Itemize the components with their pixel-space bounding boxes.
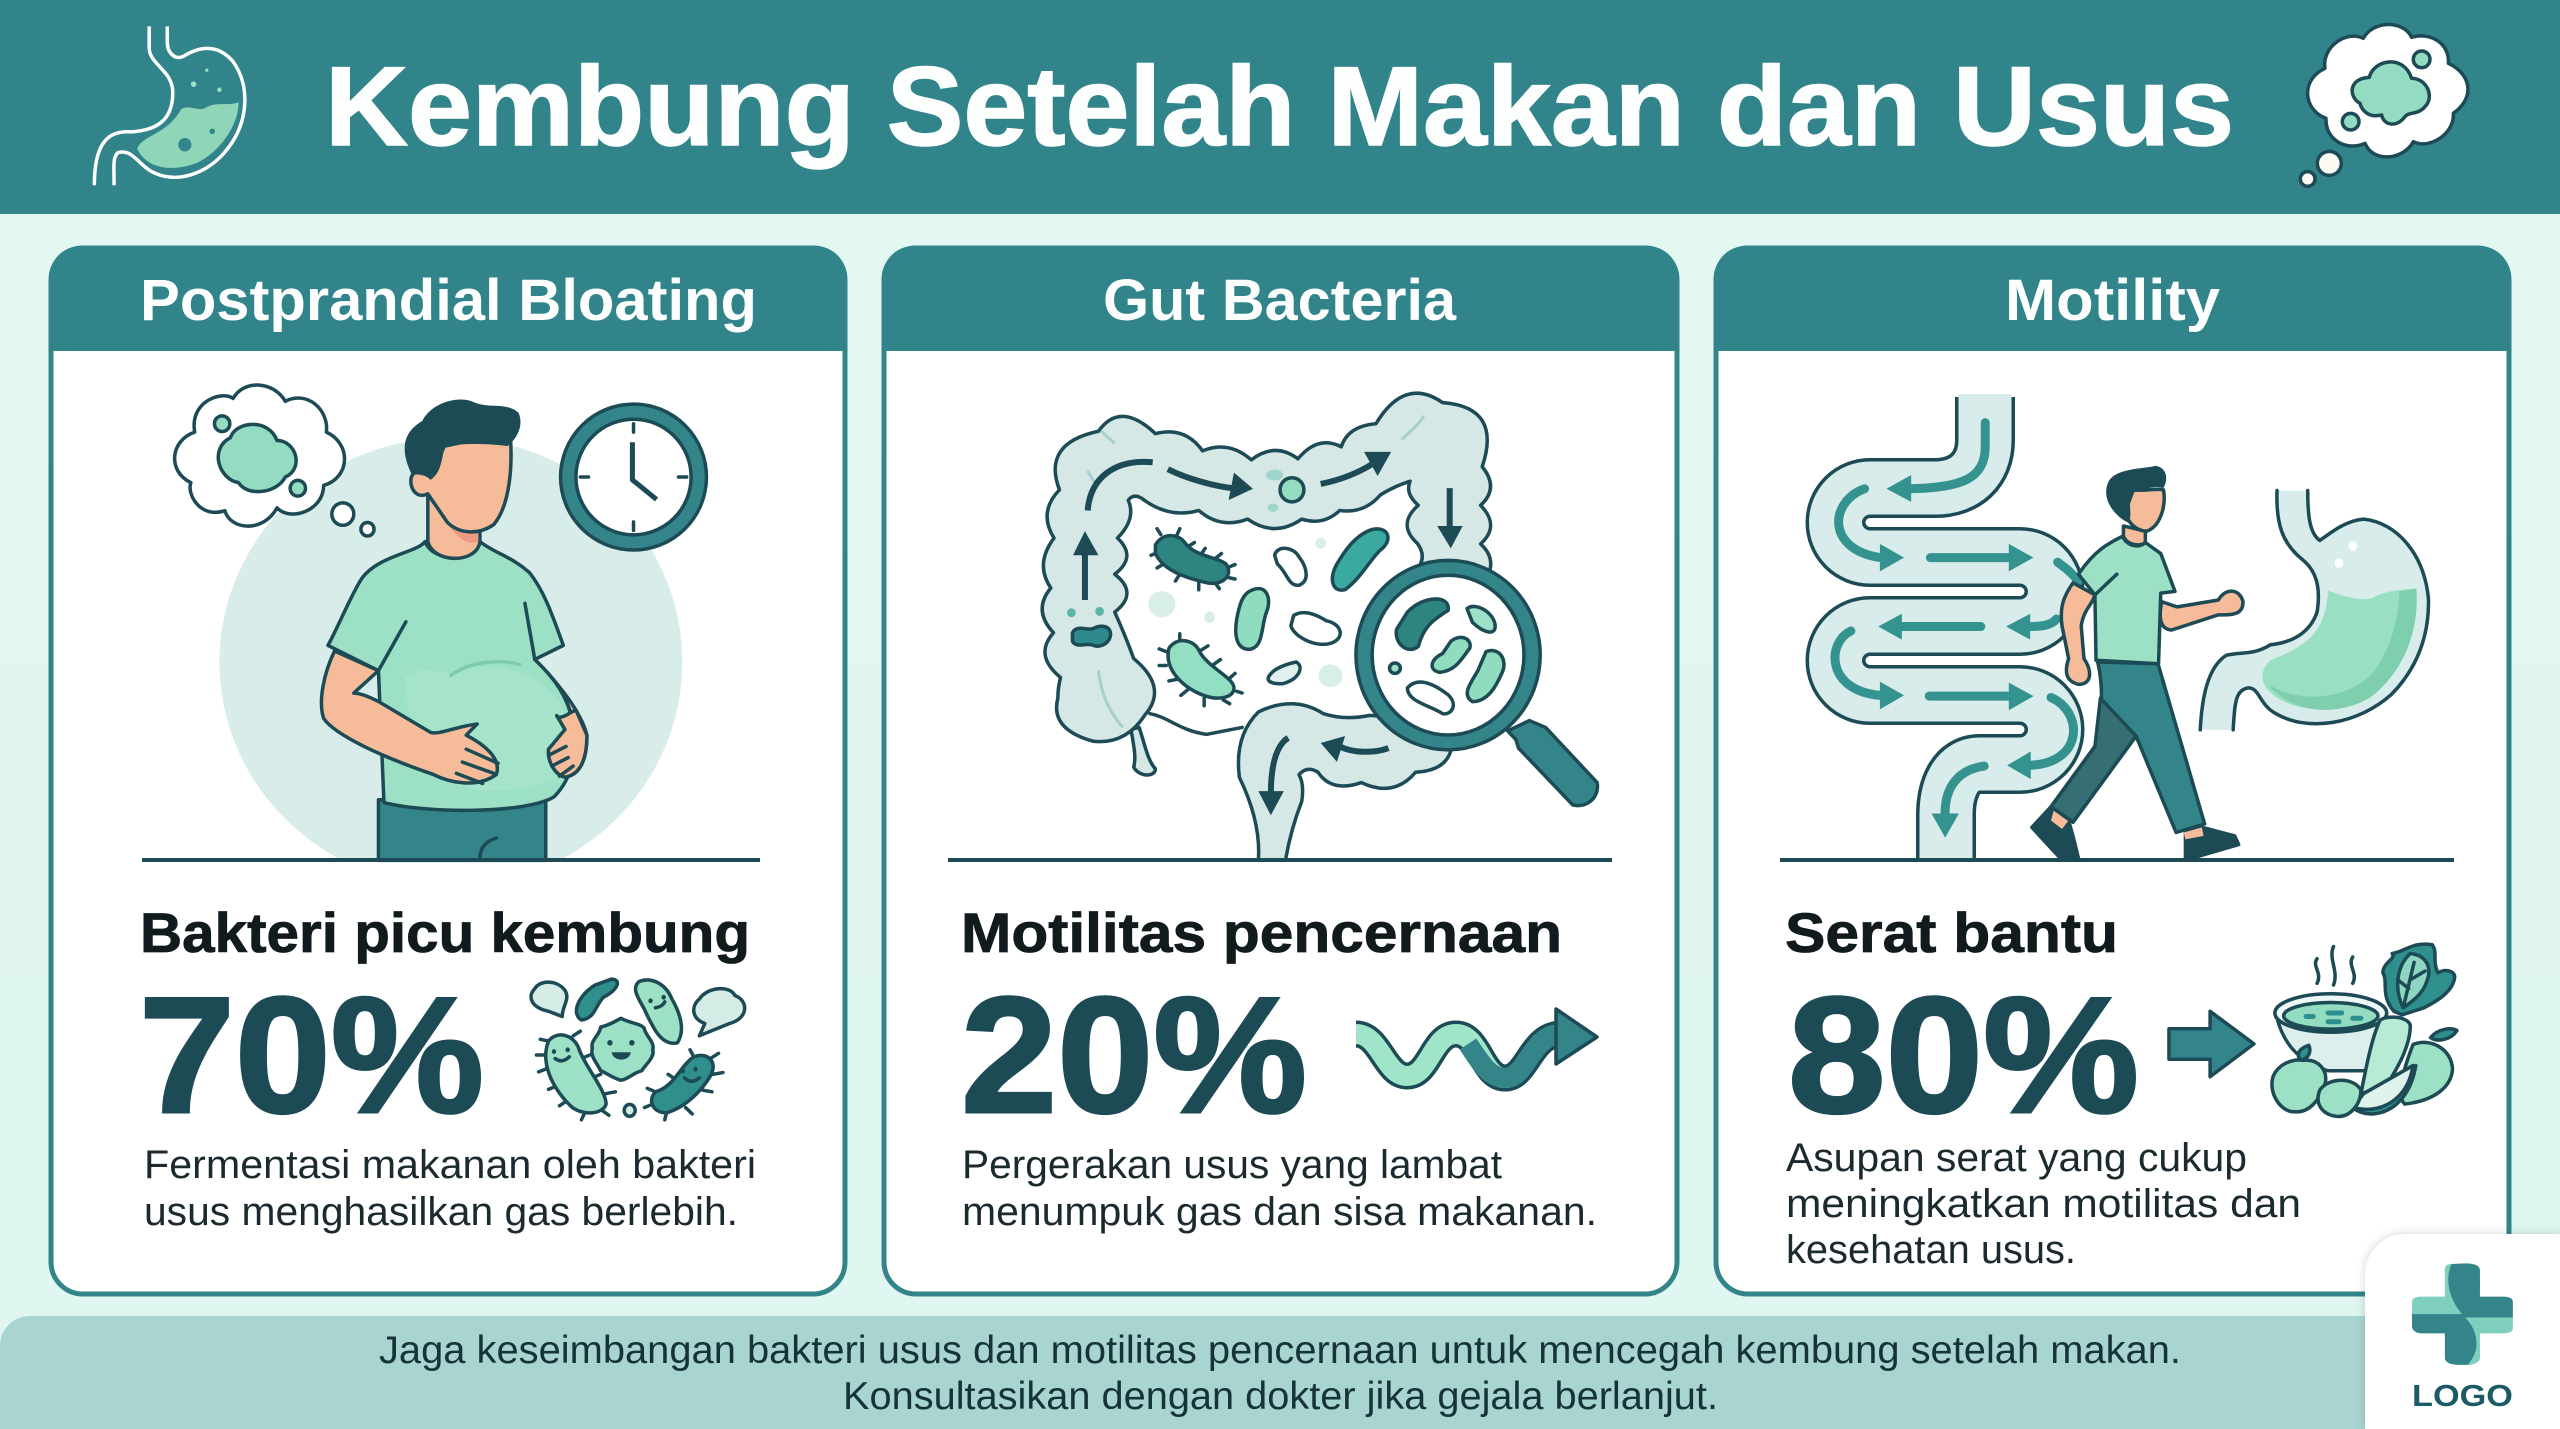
panel: Postprandial Bloating <box>49 246 847 1294</box>
flow arrows <box>1835 423 2078 838</box>
description: Fermentasi makanan oleh bakteri <box>144 1143 756 1187</box>
footer text: Konsultasikan dengan dokter jika gejala berlanjut. <box>843 1375 1718 1418</box>
flow arrows <box>1073 452 1463 815</box>
stat 80%: 80% <box>1788 963 2139 1147</box>
logo text: LOGO <box>2412 1378 2513 1413</box>
panel: Gut Bacteria <box>882 246 1679 1294</box>
description <box>962 1143 1597 1234</box>
title: Kembung Setelah Makan dan Usus <box>325 44 2234 169</box>
footer banner <box>0 1316 2560 1429</box>
panel: Motility <box>1714 246 2511 1294</box>
panel heading: Postprandial Bloating <box>140 268 757 333</box>
footer text <box>379 1329 2181 1418</box>
bacteria cluster <box>1148 529 1388 706</box>
illustration: walking man <box>2032 466 2243 860</box>
stat 70%: 70% <box>139 963 484 1147</box>
illustration: colon with bacteria and magnifier <box>1042 393 1597 860</box>
icon: stomach <box>94 26 245 185</box>
illustration: intestine tube <box>1836 394 2054 862</box>
description <box>1786 1136 2301 1272</box>
icon: fibre food bowl <box>2272 944 2457 1116</box>
logo badge <box>2365 1234 2560 1429</box>
illustration: bloated man with clock <box>175 385 706 860</box>
appendix <box>1131 727 1155 775</box>
description: kesehatan usus. <box>1786 1228 2076 1272</box>
stat 20%: 20% <box>961 963 1307 1147</box>
description: Pergerakan usus yang lambat <box>962 1143 1502 1187</box>
large intestine <box>1042 393 1491 742</box>
sigmoid colon <box>1238 704 1452 860</box>
thought bubble <box>175 385 374 536</box>
description: meningkatkan motilitas dan <box>1786 1182 2301 1226</box>
description: menumpuk gas dan sisa makanan. <box>962 1190 1597 1234</box>
panel heading: Gut Bacteria <box>1103 268 1457 333</box>
subheading: Motilitas pencernaan <box>961 901 1562 964</box>
icon: medical cross <box>2412 1263 2513 1365</box>
clock <box>561 404 706 550</box>
icon: wavy motility arrow <box>1356 1009 1597 1078</box>
magnifying glass <box>1356 560 1597 806</box>
header banner <box>0 0 2560 214</box>
subheading: Bakteri picu kembung <box>140 901 750 964</box>
man <box>321 400 587 860</box>
subheading: Serat bantu <box>1785 901 2118 964</box>
panel heading: Motility <box>2005 268 2220 333</box>
description <box>144 1143 756 1234</box>
icon: header thought bubble <box>2300 24 2468 186</box>
illustration: stomach <box>2200 491 2428 730</box>
description: Asupan serat yang cukup <box>1786 1136 2247 1180</box>
icon: friendly bacteria <box>531 979 745 1120</box>
icon: arrow to food <box>2169 1011 2254 1077</box>
footer text: Jaga keseimbangan bakteri usus dan motilitas pencernaan untuk mencegah kembung setelah makan. <box>379 1329 2181 1372</box>
description: usus menghasilkan gas berlebih. <box>144 1190 738 1234</box>
